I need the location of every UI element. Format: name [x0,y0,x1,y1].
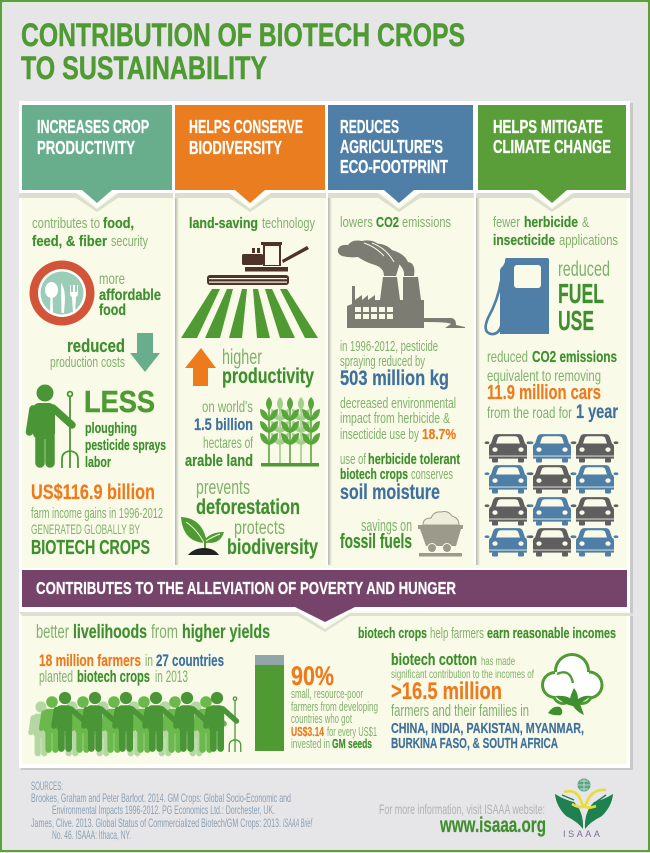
text: sources: No. 46. ISAAA: Ithaca, NY. [52,828,131,842]
text: 90 percent [291,661,378,751]
text: biotech cotton: BURKINA FASO, & SOUTH AFRICA [391,736,558,752]
text: website: For more information, visit ISAAA website: [379,801,545,817]
text: 18 million farmers: planted [39,667,73,686]
column header: helps conserve biodiversity: HELPS CONSERVE [189,117,303,137]
text: better livelihoods [36,622,270,643]
text: arable land: on world's [202,399,253,416]
column header: helps conserve biodiversity [175,105,326,212]
text: farm income gains: US$116.9 billion [31,481,155,504]
text: land-saving technology: technology [262,215,315,232]
text: farm income gains: BIOTECH CROPS [31,537,150,559]
text: reduced production costs [50,336,125,371]
text: environmental impact: insecticide use by [340,426,419,443]
text: 18 million farmers: 27 countries [156,651,224,670]
text: 90 percent: for every US$1 [327,724,377,739]
chart: 90 percent bar [255,655,284,751]
column header: increases crop productivity: INCREASES CROP [37,117,149,137]
text: pesticide reduction: 503 million kg [340,367,449,390]
text: reduced CO2 emissions: reduced [487,349,528,366]
main white panel with shadow [19,101,633,770]
column header: reduces eco-footprint: AGRICULTURE'S [340,137,443,157]
text: arable land [185,399,253,470]
text: lowers CO2 emissions: emissions [402,214,451,231]
text: sources: Environmental Impacts 1996-2012. PG Economics Ltd.: Dorchester, UK. [52,803,275,817]
text: soil moisture [340,451,460,504]
text: better livelihoods: livelihoods [73,622,147,643]
text: food security: feed, & fiber [32,233,107,250]
text: biotech cotton [391,650,584,752]
text: prevents deforestation protects biodiversity: protects [234,518,285,539]
text: farm income gains: farm income gains in 1996-2012 [31,505,163,522]
text: website [379,801,546,837]
text: arable land: 1.5 billion [194,415,253,434]
text: reduced CO2 emissions: CO2 emissions [532,349,617,366]
icon: seedling [181,517,224,555]
text: 90 percent: invested in [291,736,330,751]
text: food security: security [111,233,148,250]
text: better livelihoods: better [36,622,69,643]
text: environmental impact: decreased environmental [340,395,456,412]
text: sources: Brookes, Graham and Peter Barfoot. 2014. GM Crops: Global Socio-Economic and [31,791,291,805]
text: soil moisture: conserves [411,467,453,483]
text: fossil fuels: fossil fuels [340,531,412,553]
icon: wheat [260,397,320,466]
panel background [22,565,627,764]
column header: increases crop productivity: PRODUCTIVITY [37,138,135,158]
text: food security: contributes to [32,215,100,232]
text: fewer herbicide and insecticide: & [582,214,589,231]
icon: coal cart [418,512,463,556]
text: 90 percent: 90% [291,661,334,691]
text: fossil fuels: savings on [361,517,412,535]
text: soil moisture: herbicide tolerant [368,451,460,468]
text: prevents deforestation protects biodiversity: deforestation [196,496,300,519]
icon: ISAAA logo [555,778,613,839]
text: 90 percent: US$3.14 [291,724,325,739]
text: fewer herbicide and insecticide: herbicide [524,214,578,231]
text: fewer herbicide and insecticide: insecticide [493,232,555,249]
text: reduced CO2 emissions: 11.9 million cars [487,381,601,404]
text: higher productivity: productivity [222,365,314,388]
text: higher productivity [222,346,314,388]
title: CONTRIBUTION OF BIOTECH CROPS [21,17,465,53]
text: pesticide reduction: spraying reduced by [340,353,425,370]
text: arable land: arable land [185,451,253,470]
column header: helps conserve biodiversity: BIODIVERSITY [189,138,282,158]
text: pesticide reduction: in 1996-2012, pesticide [340,338,438,355]
text: soil moisture: soil moisture [340,481,440,504]
text: food security: food, [103,215,134,232]
banner [19,568,633,632]
text: soil moisture: biotech crops [340,466,408,483]
text: prevents deforestation protects biodiversity: prevents [196,477,250,499]
text: 18 million farmers: biotech crops [77,667,150,686]
column header: reduces eco-footprint [328,105,474,212]
column header: reduces eco-footprint: REDUCES [340,117,399,137]
text: lowers CO2 emissions: lowers [340,214,373,231]
text: environmental impact [340,395,456,443]
text: higher productivity: higher [222,346,262,369]
arrow: up [185,348,216,386]
text: reduced fuel use: FUEL [558,278,604,309]
text: reduced fuel use: reduced [558,258,610,281]
icon: combine harvester [207,242,309,285]
text: lowers CO2 emissions [340,214,451,231]
text: more affordable food [99,271,161,319]
text: prevents deforestation protects biodiversity [196,477,318,559]
text: ISAAA Brief [283,816,313,830]
icon: ISAAA logo: ISAAA [563,829,603,839]
text: fewer herbicide and insecticide [493,214,618,249]
text: 90 percent: farmers from developing [291,699,378,714]
panel: biodiversity [181,215,320,559]
icon: fuel pump [486,258,549,334]
text: more affordable food: food [99,302,126,319]
text: lowers CO2 emissions: CO2 [376,214,399,231]
text: 90 percent: GM seeds [332,736,372,751]
text: reasonable incomes [358,625,616,642]
text: biotech cotton: has made [481,654,515,668]
text: more affordable food: more [99,271,125,288]
text: farm income gains: GENERATED GLOBALLY BY [31,521,140,537]
icon: plate and cutlery [30,260,94,326]
text: soil moisture: use of [340,451,367,468]
column header: reduces eco-footprint: ECO-FOOTPRINT [340,157,448,177]
icon: cotton boll [541,653,604,715]
text: better livelihoods: higher yields [182,622,270,643]
text: reduced fuel use [558,258,610,336]
text: 18 million farmers: in [145,651,153,670]
column header: helps mitigate climate change [476,105,630,212]
text: sources [31,779,313,842]
text: reduced production costs: reduced [67,336,125,356]
banner: CONTRIBUTES TO THE ALLEVIATION OF POVERTY AND HUNGER [36,578,456,598]
text: 18 million farmers: 18 million farmers [39,651,141,670]
panel: poverty and hunger [19,565,633,764]
text: 18 million farmers [39,651,224,686]
text: land-saving technology: land-saving [189,215,258,232]
text: pesticide reduction [340,338,449,390]
text: prevents deforestation protects biodiversity: biodiversity [227,536,318,559]
icon: grid of cars [485,434,618,556]
panel: climate change [485,214,618,556]
column header: increases crop productivity [19,105,173,212]
title [21,17,465,86]
text: less inputs: LESS [84,384,155,419]
text: less inputs: labor [85,454,111,471]
title: TO SUSTAINABILITY [21,50,267,86]
text: less inputs: pesticide sprays [85,437,166,454]
text: reduced CO2 emissions [487,349,618,423]
text: fewer herbicide and insecticide: fewer [493,214,520,231]
text: sources: SOURCES: [31,779,63,793]
text: biotech cotton: farmers and their families in [391,701,529,720]
text: 18 million farmers: in 2013 [155,667,188,686]
text: 90 percent: small, resource-poor [291,686,363,701]
text: more affordable food: affordable [99,287,161,304]
text: environmental impact: impact from herbicide & [340,410,450,427]
text: food security [32,215,148,250]
text: less inputs [84,384,166,471]
text: sources: James, Clive. 2013. Global Status of Commercialized Biotech/GM Crops: 2013. [31,816,281,830]
text: biotech cotton: CHINA, INDIA, PAKISTAN, MYANMAR, [391,721,584,737]
column header: helps mitigate climate change: CLIMATE CHANGE [493,137,611,157]
text: better livelihoods: from [151,622,178,643]
text: arable land: hectares of [203,435,253,452]
text: website: www.isaaa.org [439,814,546,837]
text: reasonable incomes: help farmers [430,625,484,642]
text: environmental impact: 18.7% [422,426,456,443]
panel: eco-footprint [338,214,465,556]
icon: field rows [181,289,318,338]
column header: helps mitigate climate change: HELPS MITIGATE [493,117,603,137]
panel: crop productivity [30,215,166,559]
icon: factory with smoke [338,240,465,328]
text: biotech cotton: significant contribution to the incomes of [391,667,534,681]
text: 90 percent: countries who got [291,711,352,726]
text: biotech cotton: >16.5 million [391,678,502,705]
text: fewer herbicide and insecticide: applications [559,232,618,249]
text: reduced production costs: production costs [50,355,125,371]
text: less inputs: ploughing [85,420,137,437]
text: reduced CO2 emissions: 1 year [576,402,618,423]
text: farm income gains [31,481,163,559]
text: biotech cotton: biotech cotton [391,650,477,669]
text: land-saving technology [189,215,315,232]
text: reduced CO2 emissions: equivalent to removing [487,368,601,385]
arrow: down [130,333,160,372]
text: reduced fuel use: USE [558,305,594,336]
text: reduced CO2 emissions: from the road for [487,405,572,422]
text: fossil fuels [340,517,412,553]
icon: farmer with pitchfork [30,384,78,468]
icon: crowd of farmers [31,692,241,753]
text: reasonable incomes: biotech crops [358,625,427,642]
